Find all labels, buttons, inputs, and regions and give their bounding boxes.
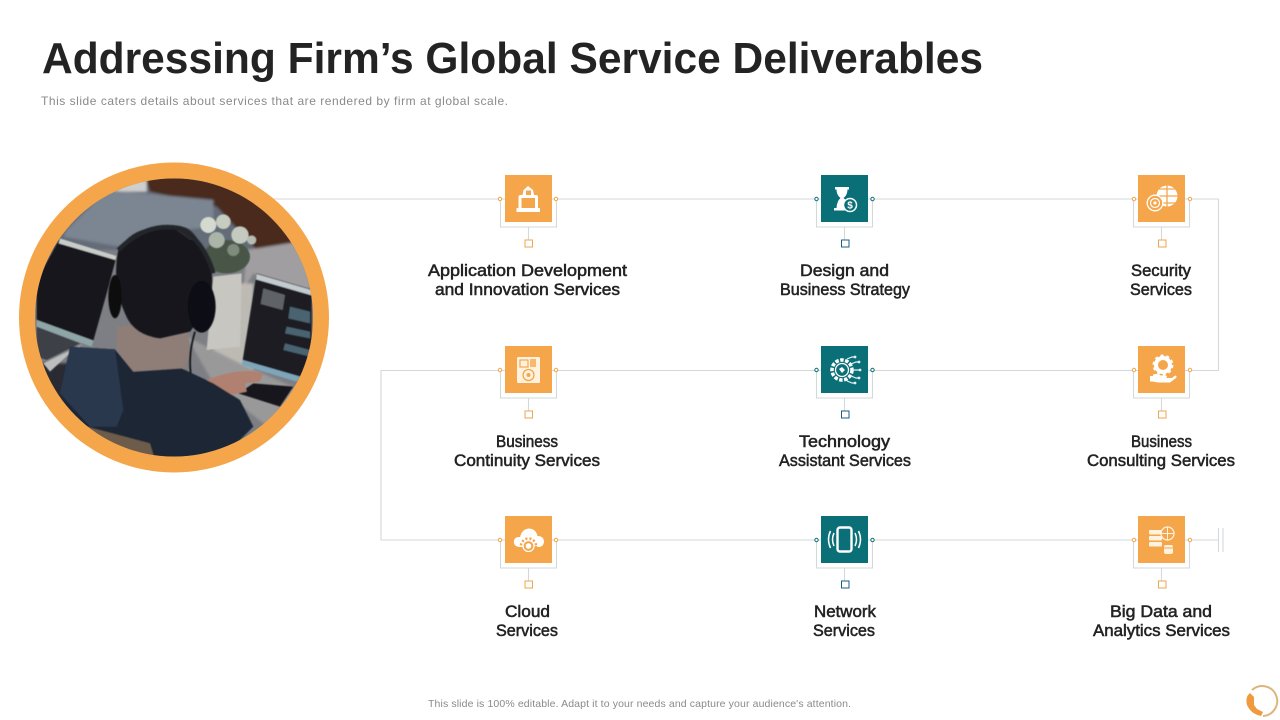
label: Network xyxy=(814,602,876,621)
service: Application Development and Innovation Services xyxy=(428,175,627,299)
icon tile: cloud with gear xyxy=(505,516,552,563)
service: Big Data and Analytics Services xyxy=(1093,516,1230,640)
label: Design and xyxy=(800,261,889,280)
node frame xyxy=(815,538,874,588)
subtitle: This slide caters details about services that are rendered by firm at global scale. xyxy=(41,94,508,108)
service: Cloud Services xyxy=(496,516,558,640)
label: Analytics Services xyxy=(1093,621,1230,640)
icon tile: globe and security badge xyxy=(1138,175,1185,222)
label xyxy=(454,432,600,470)
service: Design and Business Strategy xyxy=(780,175,910,299)
label: Business xyxy=(496,432,558,451)
logo: ring with phone handset xyxy=(1246,686,1277,716)
label: Services xyxy=(496,621,558,640)
label: Business Strategy xyxy=(780,280,910,299)
label xyxy=(496,602,558,640)
label: Big Data and xyxy=(1110,602,1212,621)
label: Security xyxy=(1131,261,1191,280)
label xyxy=(1130,261,1192,299)
label: Services xyxy=(1130,280,1192,299)
node frame xyxy=(815,368,874,418)
icon tile: gear with circuit lines xyxy=(821,346,868,393)
label: Cloud xyxy=(505,602,550,621)
icon tile: laptop on stand xyxy=(505,175,552,222)
label: Continuity Services xyxy=(454,451,600,470)
icon tile: servers, globe and database xyxy=(1138,516,1185,563)
service: Business Consulting Services xyxy=(1087,346,1235,470)
label xyxy=(780,261,910,299)
label xyxy=(1087,432,1235,470)
service: Business Continuity Services xyxy=(454,346,600,470)
photo: person wearing headphones at a laptop in an orange ring xyxy=(19,162,329,472)
label: Business xyxy=(1131,432,1192,451)
connector path linking services xyxy=(272,199,1223,552)
service: Technology Assistant Services xyxy=(779,346,911,470)
icon tile: hourglass with dollar coin: $ xyxy=(847,200,853,212)
icon tile: vibrating smartphone xyxy=(821,516,868,563)
label: Application Development xyxy=(428,261,627,280)
label xyxy=(813,602,876,640)
label: Services xyxy=(813,621,875,640)
title: Addressing Firm’s Global Service Deliverables xyxy=(42,34,983,83)
node frame xyxy=(498,368,558,418)
label xyxy=(779,432,911,470)
node frame xyxy=(1132,368,1192,418)
footer note: This slide is 100% editable. Adapt it to your needs and capture your audience's attention. xyxy=(428,698,851,710)
node frame xyxy=(498,197,558,247)
icon tile: gear over open hand xyxy=(1138,346,1185,393)
service: Network Services xyxy=(813,516,876,640)
service: Security Services xyxy=(1130,175,1192,299)
label xyxy=(428,261,627,299)
icon tile: document with target xyxy=(505,346,552,393)
node frame xyxy=(1132,538,1192,588)
label: Assistant Services xyxy=(779,451,911,470)
label: Technology xyxy=(799,432,891,451)
node frame xyxy=(1132,197,1192,247)
node frame xyxy=(815,197,874,247)
label: Consulting Services xyxy=(1087,451,1235,470)
node frame xyxy=(498,538,558,588)
label: and Innovation Services xyxy=(435,280,620,299)
label xyxy=(1093,602,1230,640)
